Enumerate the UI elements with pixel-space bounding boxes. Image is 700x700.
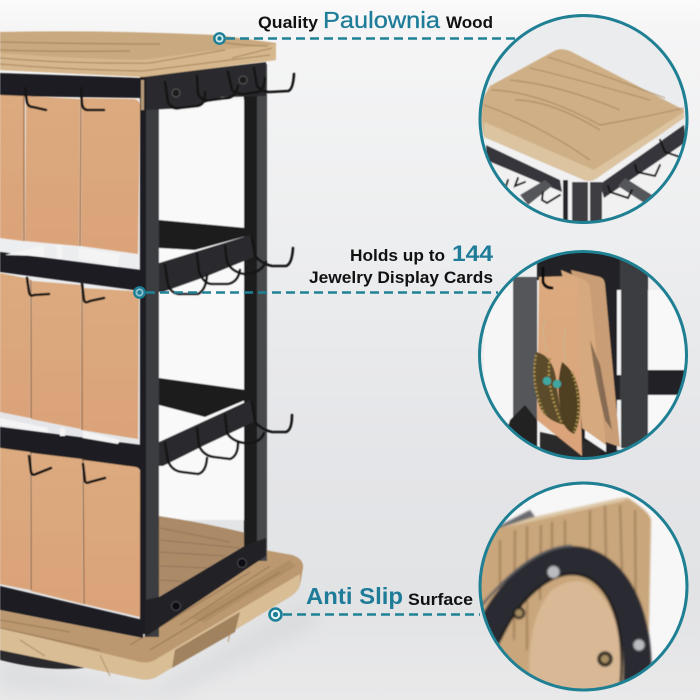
- callout line: surface: [270, 608, 480, 620]
- callout line: cards: [134, 287, 498, 298]
- board underside: [482, 496, 652, 674]
- display cards row 1: [0, 95, 140, 254]
- heading: Holds up to 144 Jewelry Display Cards: Holds up to: [350, 246, 445, 265]
- white gap strips: [5, 245, 120, 266]
- middle card: [561, 270, 606, 445]
- white see-through interior of the rack: [158, 100, 246, 520]
- legs: [563, 180, 568, 225]
- card gaps: [24, 96, 84, 604]
- heading: Quality Paulownia Wood: Wood: [446, 13, 493, 32]
- screws: [514, 608, 524, 618]
- mid side shelf band: [159, 235, 254, 292]
- bottom side frame: [145, 538, 266, 637]
- back shelf bars: [159, 220, 250, 250]
- heading: Quality Paulownia Wood: Quality: [258, 13, 319, 32]
- black turntable ring: [486, 560, 637, 695]
- wood top: [481, 49, 684, 181]
- side hooks: lower: [165, 402, 292, 474]
- heading: Quality Paulownia Wood: [258, 7, 493, 33]
- ring bearings: [548, 566, 560, 578]
- front left post: [145, 72, 159, 637]
- circle detail: display cards with earrings: [480, 250, 693, 460]
- front hooks: [25, 88, 105, 483]
- front bands: [0, 73, 141, 98]
- heading: Anti Slip Surface: Surface: [408, 590, 473, 609]
- light centre of board: [529, 581, 625, 690]
- frame bars under the top: [486, 145, 562, 192]
- turquoise stones: [543, 377, 551, 385]
- grey top-left corner: [495, 510, 535, 528]
- display cards row 2: [0, 273, 139, 439]
- circle detail: wooden top: [480, 16, 690, 230]
- front card: [537, 276, 582, 456]
- floor shadow: [0, 600, 320, 698]
- heading: Quality Paulownia Wood: Paulownia: [323, 7, 440, 33]
- earring hooks: [543, 320, 566, 365]
- inner platform wood: [159, 516, 246, 597]
- callout line: wood: [214, 33, 516, 44]
- heading: Holds up to 144 Jewelry Display Cards: Jewelry Display Cards: [309, 268, 493, 287]
- display cards row 3: [0, 448, 140, 617]
- side hooks: top: [165, 68, 294, 108]
- white card edge: [585, 428, 606, 452]
- bottom frame bolts: [172, 558, 246, 610]
- top wooden board: [0, 31, 276, 77]
- heading: Holds up to 144 Jewelry Display Cards: [309, 241, 494, 287]
- circle detail: turntable under base: [470, 483, 687, 695]
- crossbar: [647, 369, 684, 396]
- heading: Anti Slip Surface: [306, 583, 473, 609]
- earring left: [534, 352, 566, 425]
- rear right post: [244, 70, 257, 555]
- lazy susan bearing under base: [0, 648, 85, 669]
- rear earring: [590, 340, 612, 430]
- hooks: [506, 140, 680, 203]
- frame posts and white gaps: [566, 253, 621, 456]
- product: rotating jewelry stand: [0, 31, 320, 698]
- heading: Anti Slip Surface: Anti Slip: [306, 583, 403, 609]
- top side band: [146, 62, 266, 110]
- lower left bracket: [508, 405, 538, 446]
- heading: Holds up to 144 Jewelry Display Cards: 144: [452, 241, 494, 266]
- back card: [571, 270, 620, 447]
- hook: [543, 268, 552, 288]
- side hooks: middle: [165, 238, 293, 294]
- earring right: [558, 362, 580, 434]
- lower side shelf band: [159, 400, 254, 466]
- lower backdrop: [485, 139, 682, 221]
- wooden base board: [0, 550, 303, 680]
